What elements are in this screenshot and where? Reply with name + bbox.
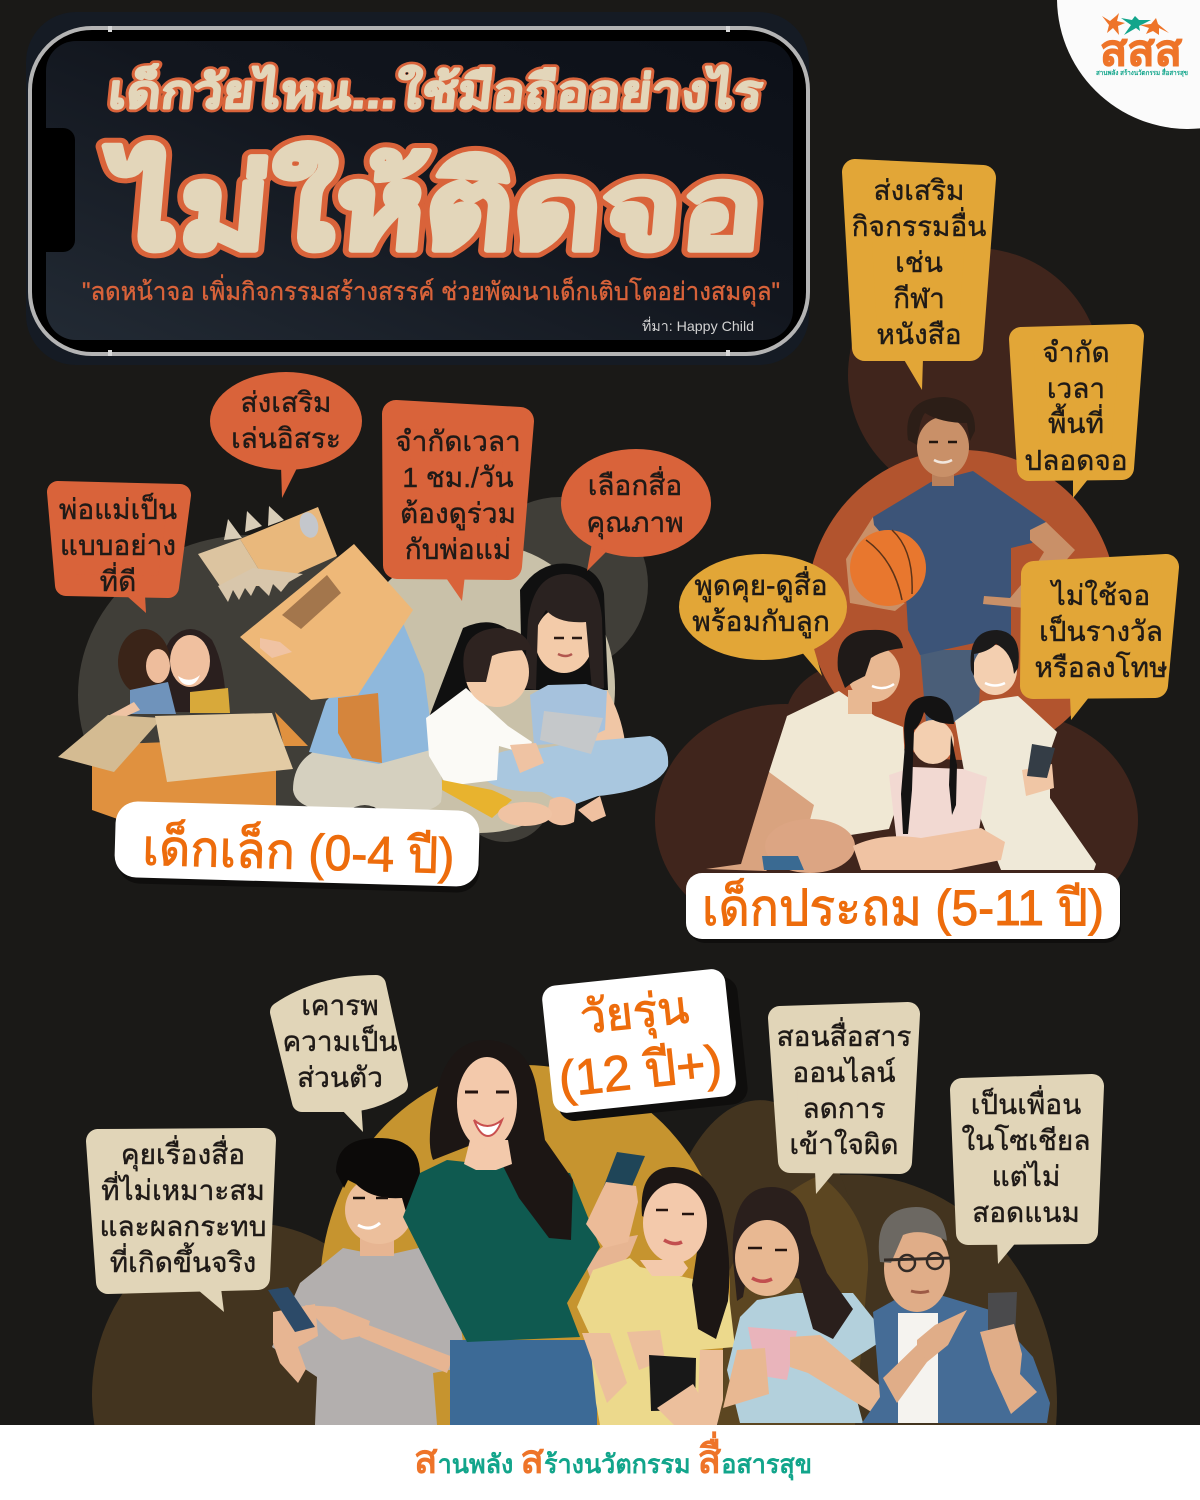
callout: limit screen time: 1 ชม./วัน bbox=[402, 462, 514, 493]
label: teens age group: วัยรุ่น bbox=[577, 981, 692, 1047]
title line two: ไม่ให้ติดจอ bbox=[93, 143, 769, 273]
callout: parents as role models: แบบอย่าง bbox=[60, 530, 176, 561]
source credit: ที่มา: Happy Child bbox=[642, 317, 754, 334]
callout: discuss inappropriate media: ที่ไม่เหมาะสม bbox=[101, 1171, 265, 1206]
callout: limit screen-free areas: ปลอดจอ bbox=[1024, 445, 1128, 476]
callout: talk and watch media together: พูดคุย-ดูสื่อ bbox=[694, 566, 828, 603]
callout: limit screen-free areas: พื้นที่ bbox=[1048, 403, 1104, 439]
callout: respect privacy: ส่วนตัว bbox=[297, 1062, 383, 1093]
callout: teach online communication: ออนไลน์ bbox=[792, 1057, 896, 1088]
section: teen backdrop circles bbox=[92, 1065, 1057, 1425]
callout: do not use screen as reward or punishment: เป็นรางวัล bbox=[1039, 614, 1163, 647]
label: young children age group bbox=[114, 801, 481, 893]
callout: discuss inappropriate media bbox=[98, 1135, 267, 1312]
callout: limit screen time: ต้องดูร่วม bbox=[400, 498, 516, 531]
callout: parents as role models bbox=[58, 492, 180, 613]
callout: teach online communication bbox=[777, 1014, 911, 1194]
illustration: teen boy with phone bbox=[268, 1138, 466, 1425]
callout: talk and watch media together: พร้อมกับลูก bbox=[692, 606, 830, 639]
footer band with slogan bbox=[0, 1425, 1200, 1500]
section: young children backdrop circles bbox=[78, 497, 648, 855]
callout: limit screen time: กับพ่อแม่ bbox=[405, 534, 511, 565]
callout: talk and watch media together bbox=[679, 554, 847, 676]
callout: be social media friends: สอดแนม bbox=[972, 1197, 1080, 1228]
callout: encourage free play: ส่งเสริม bbox=[241, 387, 331, 418]
callout: choose quality media: คุณภาพ bbox=[586, 507, 684, 540]
callout: do not use screen as reward or punishment: หรือลงโทษ bbox=[1034, 651, 1168, 683]
callout: be social media friends: แต่ไม่ bbox=[992, 1161, 1060, 1192]
label: primary school age group: เด็กประถม (5-11 ปี) bbox=[702, 878, 1104, 936]
label: teens age group bbox=[541, 968, 749, 1123]
callout: parents as role models: พ่อแม่เป็น bbox=[59, 492, 177, 525]
logo wordmark: สสส bbox=[1100, 27, 1182, 74]
callout: limit screen time bbox=[395, 414, 521, 601]
callout: do not use screen as reward or punishment bbox=[1033, 567, 1168, 720]
label: young children age group: เด็กเล็ก (0-4 ปี) bbox=[142, 818, 455, 884]
logo tagline: สานพลัง สร้างนวัตกรรม สื่อสารสุข bbox=[1096, 67, 1188, 77]
illustration: older man with glasses and phone bbox=[862, 1207, 1050, 1423]
illustration: child in cardboard dinosaur costume bbox=[198, 506, 442, 813]
footer slogan text: สานพลัง สร้างนวัตกรรม สื่อสารสุข bbox=[414, 1431, 812, 1482]
illustration: toddler and girl sharing a tablet bbox=[426, 564, 668, 826]
callout: discuss inappropriate media: และผลกระทบ bbox=[99, 1211, 267, 1242]
title line two: ไม่ให้ติดจอ bbox=[93, 143, 769, 273]
callout: respect privacy: ความเป็น bbox=[282, 1024, 398, 1057]
illustration: boy holding a basketball bbox=[846, 397, 1075, 722]
title line one: เด็กวัยไหน...ใช้มือถืออย่างไร bbox=[106, 62, 766, 118]
illustration: woman in yellow top looking at phone bbox=[577, 1167, 735, 1425]
callout: discuss inappropriate media: ที่เกิดขึ้นจริง bbox=[110, 1242, 256, 1278]
callout: be social media friends: ในโซเชียล bbox=[962, 1124, 1090, 1156]
phone title panel bbox=[26, 12, 809, 365]
illustration: older woman with pink mug bbox=[723, 1187, 888, 1423]
callout: teach online communication: ลดการ bbox=[802, 1093, 886, 1124]
callout: promote other activities: เช่น bbox=[895, 247, 943, 278]
callout: choose quality media bbox=[561, 449, 711, 571]
callout: limit screen-free areas: จำกัด bbox=[1042, 337, 1110, 368]
callout: promote other activities bbox=[852, 172, 986, 390]
illustration: parents and daughter looking at a phone bbox=[706, 630, 1096, 873]
callout: be social media friends bbox=[962, 1085, 1092, 1264]
logo: three star figures bbox=[1102, 13, 1169, 35]
callout: promote other activities: กิจกรรมอื่น bbox=[852, 207, 986, 242]
callout: teach online communication: เข้าใจผิด bbox=[789, 1128, 899, 1160]
callout: respect privacy: เคารพ bbox=[301, 990, 379, 1021]
callout: discuss inappropriate media: คุยเรื่องสื่อ bbox=[121, 1135, 245, 1172]
illustration: mother and daughter in cardboard box bbox=[58, 629, 308, 822]
title line one: เด็กวัยไหน...ใช้มือถืออย่างไร bbox=[106, 62, 766, 118]
callout: promote other activities: กีฬา bbox=[893, 283, 945, 314]
callout: do not use screen as reward or punishment: ไม่ใช้จอ bbox=[1050, 579, 1150, 611]
callout: teach online communication: สอนสื่อสาร bbox=[777, 1017, 911, 1052]
callout: choose quality media: เลือกสื่อ bbox=[588, 466, 682, 501]
section: primary school backdrop circles bbox=[655, 248, 1138, 936]
callout: encourage free play: เล่นอิสระ bbox=[231, 423, 341, 454]
callout: limit screen-free areas bbox=[1021, 336, 1132, 498]
label: teens age group: (12 ปี+) bbox=[556, 1035, 725, 1107]
callout: promote other activities: ส่งเสริม bbox=[874, 175, 964, 206]
callout: respect privacy bbox=[280, 985, 398, 1132]
callout: be social media friends: เป็นเพื่อน bbox=[971, 1085, 1081, 1120]
callout: parents as role models: ที่ดี bbox=[100, 562, 136, 597]
callout: encourage free play bbox=[210, 372, 362, 498]
callout: limit screen time: จำกัดเวลา bbox=[395, 426, 521, 457]
callout: promote other activities: หนังสือ bbox=[876, 319, 962, 350]
subtitle quote: "ลดหน้าจอ เพิ่มกิจกรรมสร้างสรรค์ ช่วยพัฒนาเด็กเติบโตอย่างสมดุล" bbox=[82, 274, 780, 307]
logo: white corner circle with organisation mark bbox=[1057, 0, 1200, 129]
illustration: smiling woman in green top with phone bbox=[403, 1040, 645, 1425]
callout: limit screen-free areas: เวลา bbox=[1047, 373, 1105, 404]
